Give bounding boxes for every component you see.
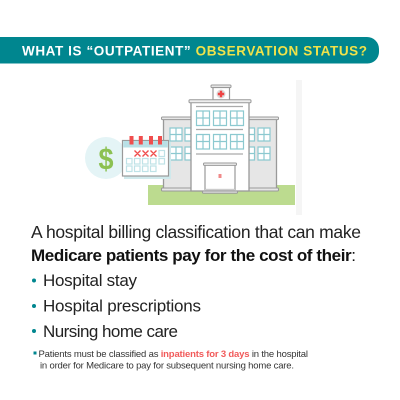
title banner [0,37,379,64]
icon: calendar [122,136,171,179]
footnote: Patients must be classified as inpatients for 3 days in the hospital [38,349,308,360]
definition text: Medicare patients pay for the cost of their: [31,246,356,265]
hospital illustration [148,80,302,215]
definition text: A hospital billing classification that can make [31,222,361,242]
title text: WHAT IS “OUTPATIENT” OBSERVATION STATUS? [22,44,367,58]
bullet: hospital stay: Hospital stay [43,271,138,290]
bullet list [32,271,201,341]
icon: dollar sign in circle [85,137,127,179]
bullet: hospital prescriptions: Hospital prescriptions [43,296,201,316]
bullet: nursing home care: Nursing home care [43,322,178,341]
icon: dollar sign in circle: $ [98,141,114,176]
footnote [34,349,308,372]
door [202,163,238,193]
ground [148,185,295,205]
right wing [248,117,278,191]
icon: red cross [216,90,226,98]
left wing [162,117,192,191]
footnote: in order for Medicare to pay for subsequent nursing home care. [40,360,294,372]
central block [189,85,251,193]
definition text [31,222,361,265]
